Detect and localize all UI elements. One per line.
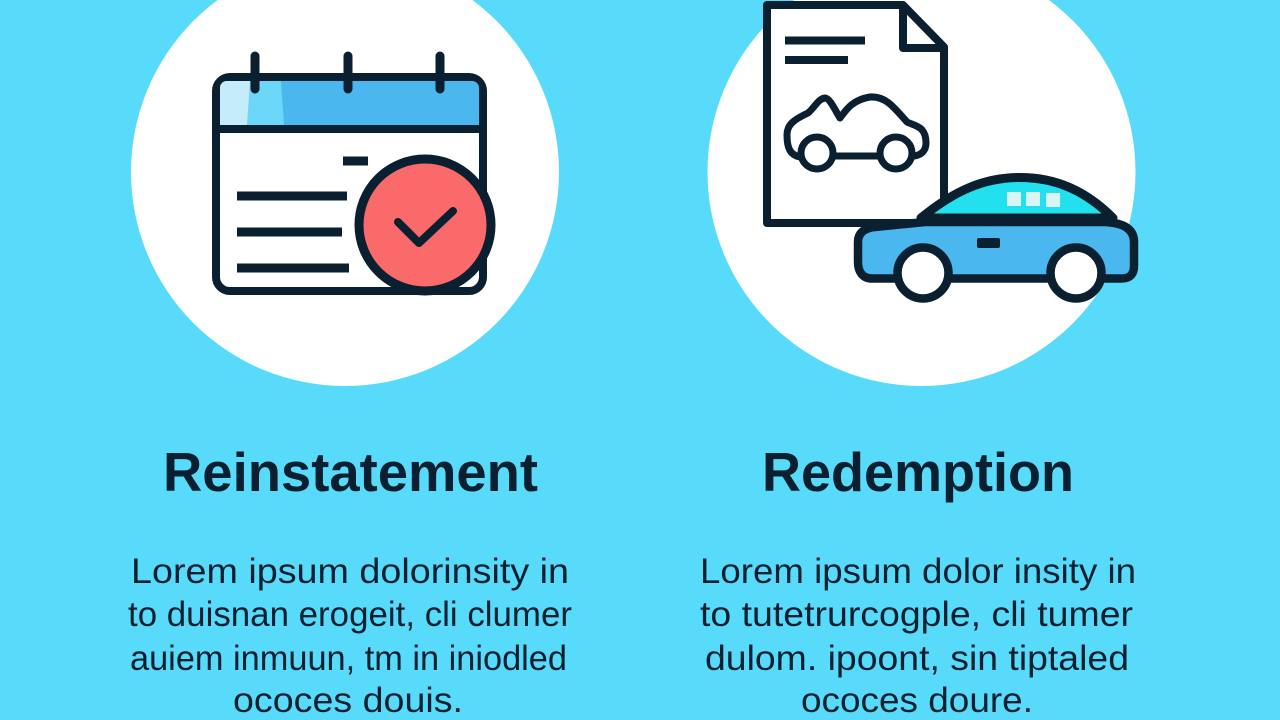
text block: reinstatement description: ococes douis. [233, 680, 463, 720]
panel: reinstatement [128, 0, 572, 720]
panel: redemption [700, 0, 1136, 720]
icon: calendar with check badge [216, 56, 491, 291]
text block: redemption description: to tutetrurcogple, cli tumer [700, 594, 1133, 634]
icon: car [858, 178, 1134, 298]
text block: redemption description [700, 551, 1136, 720]
text block: redemption description: dulom. ipoont, sin tiptaled [705, 638, 1129, 678]
text block: reinstatement description: auiem inmuun, tm in iniodled [130, 638, 567, 678]
text block: reinstatement description: to duisnan erogeit, cli clumer [128, 594, 572, 634]
icon circle: reinstatement [131, 0, 559, 386]
heading: reinstatement: Reinstatement [163, 441, 538, 503]
heading: redemption: Redemption [762, 441, 1074, 503]
text block: redemption description: Lorem ipsum dolor insity in [700, 551, 1136, 591]
icon: vehicle title document [767, 5, 944, 223]
text block: reinstatement description [128, 551, 572, 720]
text block: redemption description: ococes doure. [801, 680, 1033, 720]
text block: reinstatement description: Lorem ipsum dolorinsity in [131, 551, 569, 591]
icon circle: redemption [708, 0, 1136, 386]
